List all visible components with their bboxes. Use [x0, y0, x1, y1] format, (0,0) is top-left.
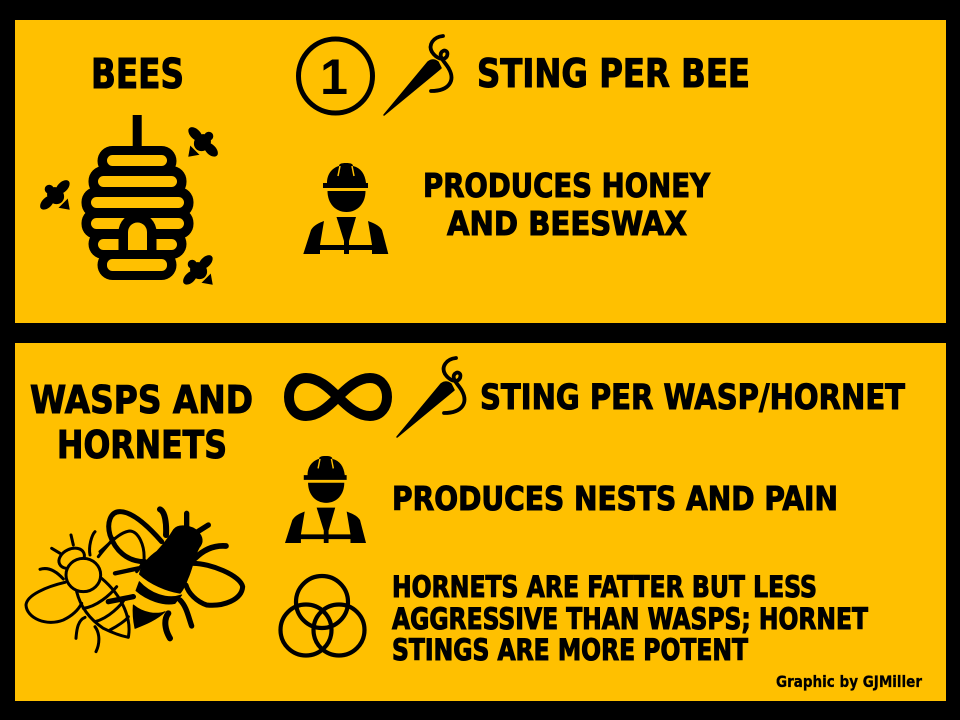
- illustration: wasp and hornet: [26, 509, 243, 652]
- panel: bees: [15, 20, 946, 323]
- solid insect: [100, 509, 243, 638]
- heading: wasps and hornets: [30, 378, 253, 467]
- icon: number one in circle: 1: [320, 49, 348, 105]
- icon: small bee upper right: [174, 119, 226, 171]
- panel background: wasps and hornets: [15, 343, 946, 701]
- icon: needle and thread: [384, 36, 451, 115]
- heading: wasps and hornets: HORNETS: [57, 423, 227, 467]
- text: hornet facts: STINGS ARE MORE POTENT: [392, 633, 748, 667]
- text: produces honey and beeswax: [423, 166, 711, 243]
- icon: beehive: [82, 115, 194, 280]
- icon: small bee left: [32, 172, 84, 224]
- icon: number one in circle: [298, 39, 372, 113]
- text: produces honey and beeswax: AND BEESWAX: [447, 204, 687, 243]
- panel: wasps and hornets: [15, 343, 946, 701]
- icon: worker: [303, 163, 388, 254]
- heading: wasps and hornets: WASPS AND: [30, 378, 253, 422]
- icon: needle and thread: [397, 358, 464, 437]
- text: produces honey and beeswax: PRODUCES HONEY: [423, 166, 711, 205]
- panel background: bees: [15, 20, 946, 323]
- text: produces nests and pain: PRODUCES NESTS AND PAIN: [392, 479, 838, 518]
- outlined insect: [26, 532, 129, 652]
- icon: worker: [285, 456, 366, 543]
- text: sting per bee: STING PER BEE: [477, 52, 750, 97]
- text: hornet facts: HORNETS ARE FATTER BUT LESS: [392, 570, 817, 604]
- icon: small bee lower right: [175, 247, 227, 299]
- icon: three overlapping circles: [280, 576, 364, 656]
- heading: bees: BEES: [91, 50, 184, 98]
- credit line: Graphic by GJMiller: [776, 672, 922, 691]
- text: hornet facts: [392, 570, 868, 667]
- icon: infinity symbol: [289, 378, 387, 416]
